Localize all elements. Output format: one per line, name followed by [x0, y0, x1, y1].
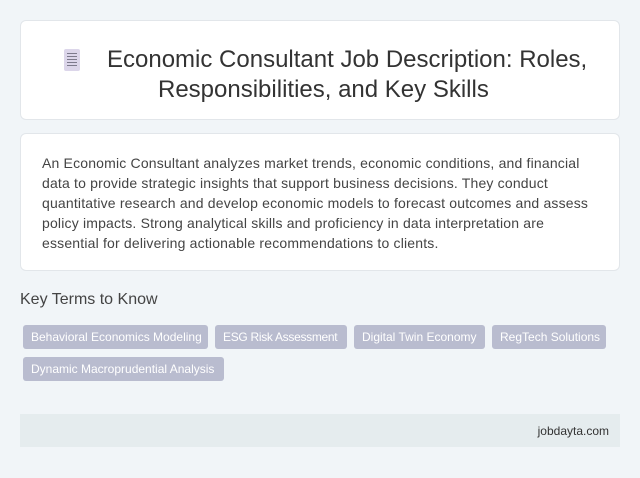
tag: [492, 325, 606, 349]
title: Responsibilities, and Key Skills: [158, 76, 489, 103]
description text: quantitative research and develop economic models to forecast outcomes and assess: [42, 195, 588, 211]
tag: [23, 357, 224, 381]
tag: [215, 325, 347, 349]
footer text: jobdayta.com: [538, 424, 609, 438]
tag: Dynamic Macroprudential Analysis: [31, 362, 214, 376]
tag: Behavioral Economics Modeling: [31, 330, 202, 344]
tag: [354, 325, 485, 349]
tag: RegTech Solutions: [500, 330, 600, 344]
description text: essential for delivering actionable recommendations to clients.: [42, 235, 439, 251]
description text: [42, 155, 588, 251]
tag: [23, 325, 208, 349]
tag: Digital Twin Economy: [362, 330, 476, 344]
title: Economic Consultant Job Description: Roles,: [107, 46, 587, 73]
description text: data to provide strategic insights that support business decisions. They conduct: [42, 175, 548, 191]
heading: key terms: Key Terms to Know: [20, 291, 158, 308]
icon: document: [64, 49, 80, 71]
description text: policy impacts. Strong analytical skills and proficiency in data interpretation are: [42, 215, 544, 231]
title card: [20, 20, 620, 120]
footer: [20, 414, 620, 447]
tag: ESG Risk Assessment: [223, 330, 337, 344]
description text: An Economic Consultant analyzes market trends, economic conditions, and financial: [42, 155, 580, 171]
description card: [20, 133, 620, 271]
title: [107, 46, 587, 103]
